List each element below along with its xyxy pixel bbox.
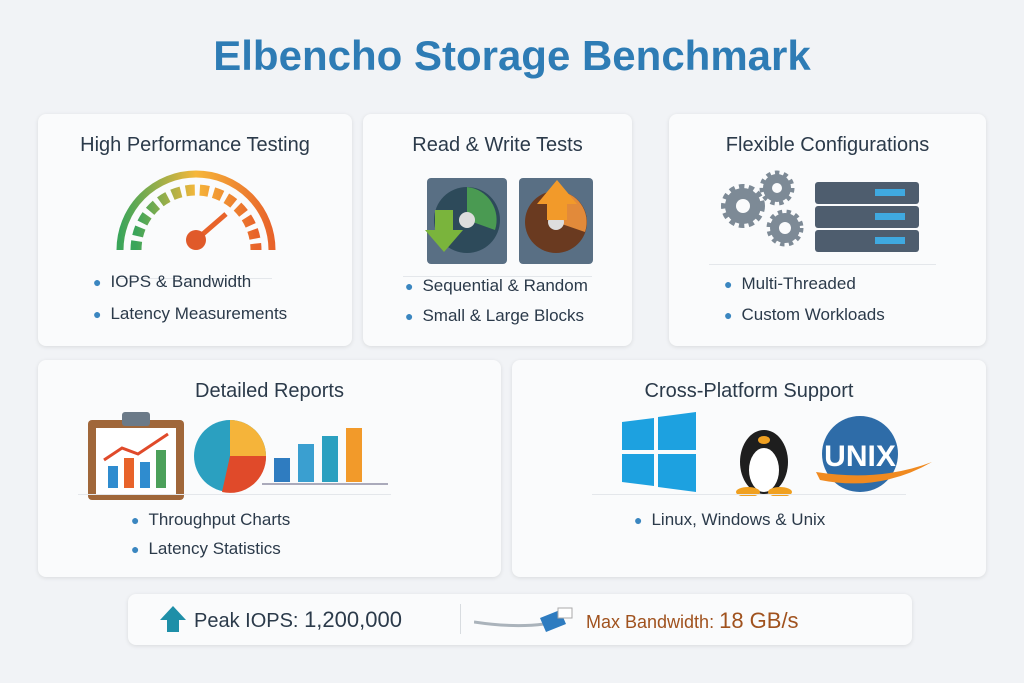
panel: read write: ● Small & Large Blocks bbox=[405, 306, 584, 325]
panel: reports: ● Latency Statistics bbox=[131, 539, 281, 558]
heading: Cross-Platform Support bbox=[645, 380, 853, 402]
panel: high performance: ● Latency Measurements bbox=[93, 304, 287, 323]
panel: read write bbox=[363, 114, 632, 346]
panel: flexible: ● Custom Workloads bbox=[724, 305, 885, 324]
title: Elbencho Storage Benchmark bbox=[213, 32, 811, 79]
heading: Detailed Reports bbox=[195, 380, 344, 402]
heading: High Performance Testing bbox=[80, 134, 310, 156]
bullets: ● IOPS & Bandwidth bbox=[93, 272, 251, 291]
bullets: ● Throughput Charts bbox=[131, 510, 290, 529]
stat: peak iops: Peak IOPS: 1,200,000 bbox=[194, 607, 402, 632]
panel: cross-platform bbox=[512, 360, 986, 577]
icon: drives bbox=[425, 178, 593, 264]
panel: reports bbox=[38, 360, 501, 577]
heading: Flexible Configurations bbox=[726, 134, 929, 156]
icon: cable bbox=[474, 608, 572, 632]
icons: OS logos bbox=[622, 412, 932, 496]
icon: gears & server bbox=[721, 170, 919, 252]
stat: max bandwidth: Max Bandwidth: 18 GB/s bbox=[586, 608, 799, 633]
bottom stats bar bbox=[128, 594, 912, 645]
bullets: ● Sequential & Random bbox=[405, 276, 588, 295]
heading: Read & Write Tests bbox=[412, 134, 583, 156]
icon: charts bbox=[88, 412, 388, 500]
panel: flexible bbox=[669, 114, 986, 346]
panel: high performance bbox=[38, 114, 352, 346]
bullet: ● Linux, Windows & Unix bbox=[634, 510, 825, 529]
icons: OS logos: UNIX bbox=[824, 440, 896, 473]
bullets: ● Multi-Threaded bbox=[724, 274, 856, 293]
icon: gauge bbox=[116, 170, 276, 250]
icon: up arrow bbox=[160, 606, 186, 632]
